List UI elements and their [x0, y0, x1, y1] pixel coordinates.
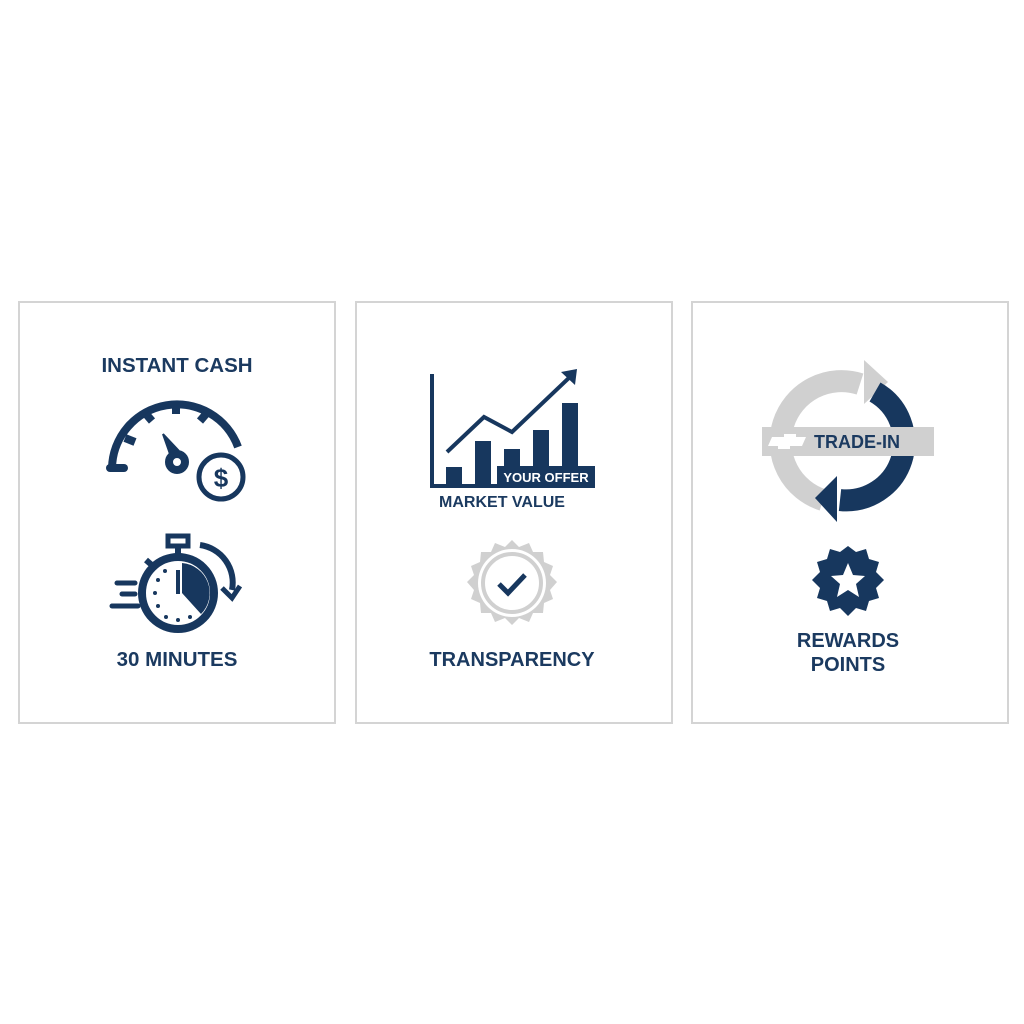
label: market value: MARKET VALUE [439, 494, 565, 511]
panel: trade-in [691, 301, 1009, 724]
panel: instant cash [18, 301, 336, 724]
icons: POINTS [811, 654, 885, 676]
icon: gauge with dollar [110, 403, 243, 499]
label: 30 minutes: 30 MINUTES [117, 648, 237, 671]
label: rewards points: REWARDS [797, 630, 899, 652]
icon: gauge with dollar: $ [214, 463, 229, 493]
panel: market value [355, 301, 673, 724]
icon: trade-in cycle: TRADE-IN [814, 432, 900, 452]
icon: transparency badge [467, 540, 557, 625]
chart: market value: YOUR OFFER [503, 470, 589, 485]
chart: market value [430, 369, 595, 488]
icon: rewards star badge [812, 546, 884, 616]
label: transparency: TRANSPARENCY [429, 649, 595, 671]
icon: trade-in cycle [762, 360, 934, 522]
icon: stopwatch [112, 536, 240, 629]
title: instant cash: INSTANT CASH [101, 354, 253, 377]
